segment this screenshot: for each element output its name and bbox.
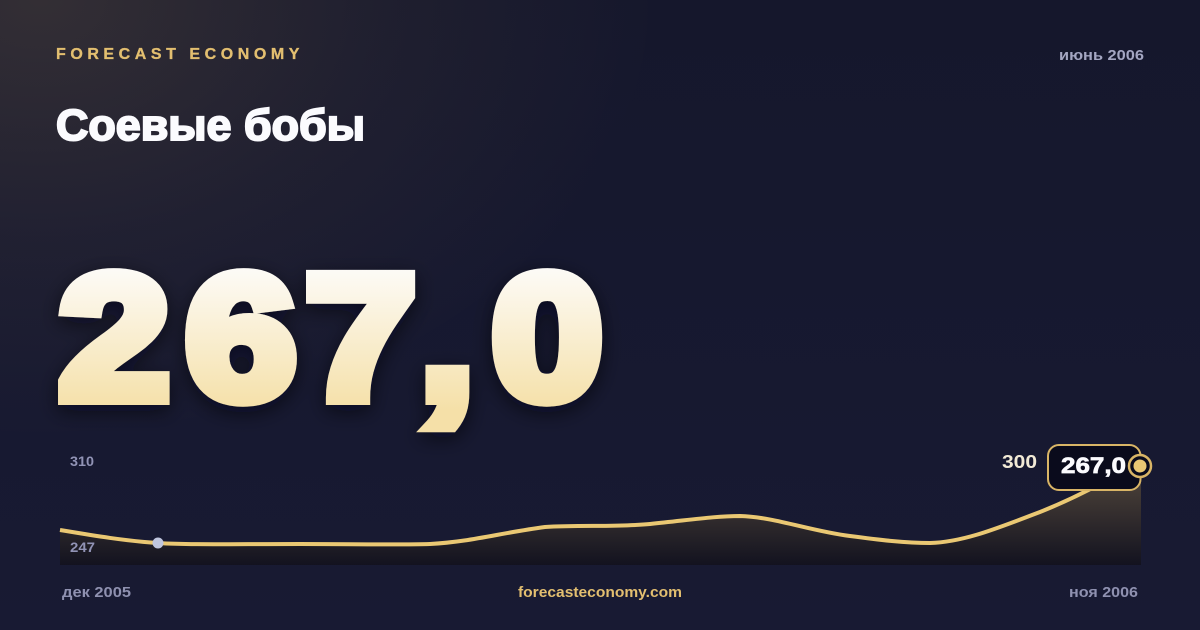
brand label: FORECAST ECONOMY — [56, 46, 304, 63]
axis max: 310 — [70, 453, 94, 469]
big value: 267,0 — [59, 239, 602, 435]
minimum marker — [152, 538, 164, 548]
chart: price line — [60, 466, 1141, 565]
peak label: 300 — [1002, 452, 1037, 472]
end date: ноя 2006 — [1069, 584, 1138, 601]
value callout — [1048, 445, 1140, 490]
current point marker — [1129, 455, 1151, 477]
value callout: 267,0 — [1061, 453, 1126, 478]
start date: дек 2005 — [62, 584, 131, 601]
title: Соевые бобы — [56, 101, 365, 150]
chart area — [60, 466, 1141, 565]
site: forecasteconomy.com — [518, 584, 682, 601]
date label: июнь 2006 — [1059, 47, 1144, 64]
chart line — [60, 484, 1100, 544]
axis min: 247 — [70, 539, 95, 555]
